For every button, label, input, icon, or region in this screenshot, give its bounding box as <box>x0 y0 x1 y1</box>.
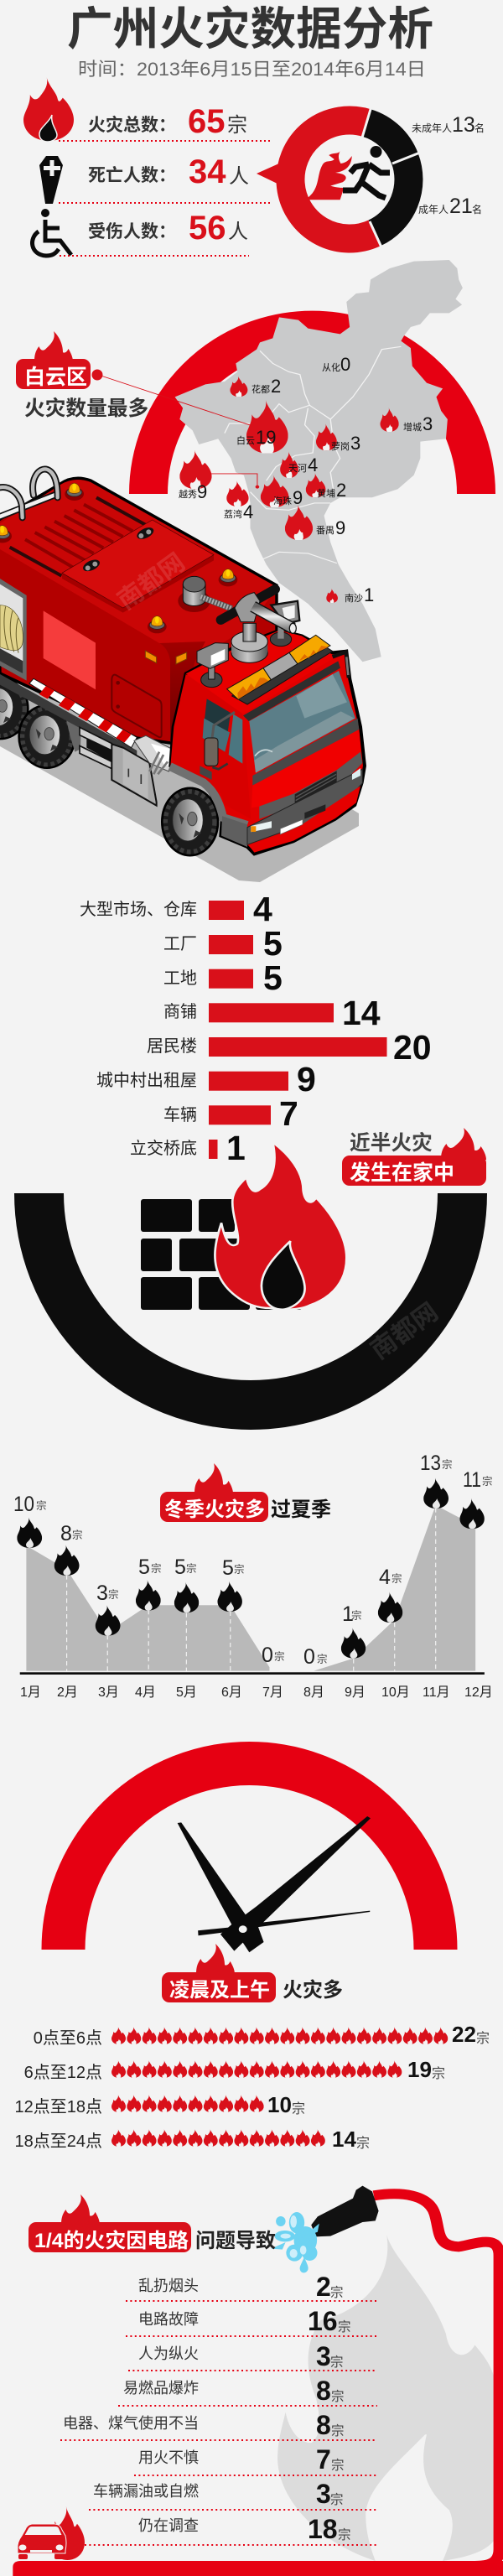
panel: monthly fires: 宗 <box>482 1475 493 1488</box>
date range subtitle: 时间：2013年6月15日至2014年6月14日 <box>78 59 426 80</box>
donut label: minors: 名 <box>474 122 485 134</box>
heading: winter: 过夏季 <box>271 1498 331 1521</box>
panel: monthly fires: 宗 <box>234 1563 245 1576</box>
value labels: 8 <box>60 1522 72 1545</box>
value labels: 0 <box>262 1644 273 1667</box>
panel: monthly fires <box>13 1452 493 1700</box>
district labels: 9 <box>293 487 303 508</box>
value labels: 13 <box>420 1452 441 1475</box>
bar labels: 工地 <box>163 969 197 988</box>
bumper <box>247 769 362 844</box>
fuel tank <box>111 744 157 806</box>
donut chart: casualties <box>257 106 424 249</box>
bar values: 5 <box>263 958 283 997</box>
district labels: 4 <box>308 454 318 475</box>
cause counts: 7 <box>316 2444 331 2475</box>
icon: burning car <box>18 2506 85 2560</box>
total fires row: 宗 <box>227 114 247 137</box>
illustration: fire truck <box>0 469 365 882</box>
deaths row: 人 <box>229 165 249 188</box>
district labels: 19 <box>256 427 276 448</box>
panel: causes: 宗 <box>330 2492 344 2507</box>
panel: causes: 宗 <box>330 2285 344 2300</box>
bar labels: 商铺 <box>163 1002 197 1021</box>
district flames <box>179 376 399 603</box>
bar values <box>226 890 432 1167</box>
cause counts: 8 <box>316 2410 331 2440</box>
rails <box>0 469 58 517</box>
area chart <box>17 1478 485 1675</box>
cause counts: 18 <box>308 2514 338 2544</box>
nozzle <box>311 2186 379 2236</box>
district labels: 荔湾 <box>224 508 242 520</box>
side windows <box>203 699 231 752</box>
panel: bar chart by location <box>80 890 432 1167</box>
beacons <box>65 483 84 501</box>
month axis labels: 8月 <box>303 1685 324 1700</box>
water splash <box>271 2212 319 2272</box>
bar values: 20 <box>393 1028 432 1067</box>
heading: electrical: 问题导致 <box>195 2230 276 2252</box>
panel: home fire illustration <box>39 1142 463 1405</box>
roof panel <box>62 520 214 613</box>
donut label: adults: 成年人 <box>418 204 449 216</box>
cause labels: 易燃品爆炸 <box>123 2380 199 2397</box>
bar labels <box>80 900 197 1158</box>
title: 广州火灾数据分析 <box>67 4 433 55</box>
value labels <box>13 1452 481 1669</box>
heading: electrical <box>29 2194 276 2252</box>
value labels: 4 <box>379 1566 391 1589</box>
panel: fires by time of day: 宗 <box>356 2136 370 2151</box>
icon: big flame <box>215 1142 346 1310</box>
cab side <box>170 674 251 819</box>
district labels <box>179 354 433 605</box>
panel: clock <box>64 1763 436 2002</box>
time labels: 6点至12点 <box>24 2063 102 2082</box>
cause labels: 车辆漏油或自燃 <box>93 2483 199 2500</box>
injuries row: 人 <box>228 221 248 243</box>
district labels: 0 <box>340 354 350 375</box>
month axis labels: 1月 <box>20 1685 41 1700</box>
callout: Baiyun district: 白云区 <box>24 366 87 389</box>
district labels: 海珠 <box>273 495 292 506</box>
counts <box>267 2022 476 2152</box>
panel: monthly fires: 宗 <box>442 1458 453 1471</box>
panel: monthly fires: 宗 <box>151 1562 162 1575</box>
district labels: 3 <box>350 433 360 454</box>
value labels: 5 <box>174 1555 186 1579</box>
front wheel <box>162 788 218 855</box>
ground shadow <box>0 671 359 882</box>
flame row 18-24 <box>111 2129 325 2147</box>
panel: causes: 宗 <box>338 2527 351 2542</box>
time labels: 0点至6点 <box>34 2028 102 2048</box>
donut label: minors: 13 <box>452 113 475 137</box>
map of Guangzhou <box>97 260 463 662</box>
time labels <box>15 2028 102 2151</box>
total fires row <box>88 103 247 140</box>
cause labels: 用火不慎 <box>138 2449 199 2466</box>
roof vents <box>25 505 132 569</box>
value labels: 5 <box>222 1556 234 1580</box>
panel: monthly fires: 宗 <box>274 1650 285 1663</box>
district labels: 2 <box>336 480 346 501</box>
cause labels: 电路故障 <box>138 2311 199 2328</box>
value labels: 10 <box>13 1493 34 1516</box>
donut label: adults: 21 <box>449 195 473 218</box>
district labels: 番禺 <box>316 525 334 536</box>
big grey flame and hose <box>13 2186 503 2576</box>
district labels: 9 <box>335 517 345 538</box>
mirror <box>212 712 235 740</box>
district labels: 2 <box>271 376 281 397</box>
bar values: 14 <box>342 994 381 1032</box>
month axis labels: 5月 <box>176 1685 197 1700</box>
district labels: 南沙 <box>345 593 363 604</box>
bar values: 4 <box>253 890 272 928</box>
side marker lights <box>145 651 157 663</box>
bar values: 9 <box>297 1060 316 1098</box>
flame row 0-6 <box>111 2027 448 2044</box>
panel: totals <box>23 77 249 256</box>
front face <box>252 719 359 786</box>
panel: monthly fires: 宗 <box>351 1609 362 1622</box>
bar labels: 车辆 <box>163 1105 197 1124</box>
callout: nearly half at home: 发生在家中 <box>350 1161 454 1185</box>
box body <box>0 478 277 743</box>
clock hands <box>178 1816 371 1952</box>
callout: Baiyun district <box>16 331 148 420</box>
donut label: adults: 名 <box>472 203 482 216</box>
district labels: 4 <box>243 501 253 522</box>
callout: nearly half at home <box>342 1128 486 1186</box>
panel: monthly fires: 宗 <box>72 1529 83 1541</box>
counts: 10 <box>267 2092 292 2117</box>
cause counts <box>308 2272 338 2544</box>
deaths row: 34 <box>189 153 226 190</box>
month axis labels: 11月 <box>423 1685 450 1700</box>
panel: fires by time of day: 宗 <box>292 2101 305 2116</box>
icon: running person and flame <box>305 146 390 200</box>
month axis labels: 2月 <box>57 1685 78 1700</box>
time labels: 12点至18点 <box>15 2097 102 2116</box>
connector lines <box>97 375 257 486</box>
panel: monthly fires: 宗 <box>36 1499 47 1512</box>
bar values: 5 <box>263 924 283 963</box>
bar labels: 立交桥底 <box>130 1139 197 1158</box>
value labels: 0 <box>303 1645 315 1669</box>
small cylinder and spring <box>178 589 210 612</box>
cause dividers <box>60 2301 377 2545</box>
deaths row <box>88 153 249 190</box>
district labels: 花都 <box>252 384 270 395</box>
panel: causes: 宗 <box>331 2389 345 2404</box>
cause labels <box>63 2277 199 2534</box>
black ring <box>39 1193 463 1405</box>
month axis labels: 10月 <box>381 1685 410 1700</box>
cause counts: 2 <box>316 2272 331 2302</box>
total fires row: 火灾总数： <box>88 115 176 135</box>
panel: causes: 宗 <box>330 2355 344 2370</box>
month axis labels: 6月 <box>221 1685 242 1700</box>
district labels: 黄埔 <box>317 487 335 499</box>
heading: early morning: 火灾多 <box>283 1979 343 2002</box>
callout: nearly half at home: 近半火灾 <box>350 1131 433 1155</box>
callout: Baiyun district: 火灾数量最多 <box>24 397 148 420</box>
deaths row: 死亡人数： <box>88 166 176 185</box>
pointer <box>257 163 281 185</box>
month axis labels: 7月 <box>262 1685 283 1700</box>
district labels: 增城 <box>403 421 422 433</box>
flame row 6-12 <box>111 2060 402 2078</box>
bar labels: 工厂 <box>163 935 197 953</box>
red arc <box>64 1763 436 1950</box>
injuries row <box>88 210 248 247</box>
icon: flame <box>23 77 74 142</box>
cause labels: 乱扔烟头 <box>138 2277 199 2294</box>
counts: 22 <box>452 2022 476 2047</box>
month axis labels <box>20 1685 493 1700</box>
value labels: 1 <box>342 1602 354 1626</box>
panel: causes: 宗 <box>338 2319 351 2334</box>
injuries row: 受伤人数： <box>88 222 176 242</box>
panel: district map <box>16 260 476 662</box>
panel: fires by time of day: 宗 <box>432 2066 445 2081</box>
counts: 14 <box>332 2127 356 2152</box>
heading: early morning: 凌晨及上午 <box>169 1979 270 2002</box>
panel: monthly fires: 宗 <box>317 1653 328 1665</box>
cause labels: 人为纵火 <box>138 2345 199 2362</box>
panel: monthly fires: 宗 <box>186 1562 197 1575</box>
district labels: 越秀 <box>179 488 197 500</box>
cause counts: 3 <box>316 2479 331 2509</box>
cause labels: 仍在调查 <box>138 2517 199 2534</box>
donut label: adults <box>418 195 482 218</box>
donut label: minors: 未成年人 <box>412 122 452 134</box>
chassis <box>0 674 137 759</box>
icon: coffin <box>39 156 63 204</box>
panel: monthly fires: 宗 <box>108 1588 119 1601</box>
hose <box>374 2194 499 2566</box>
turret <box>220 589 296 662</box>
bar values: 1 <box>226 1129 246 1167</box>
cab roof <box>186 631 335 714</box>
value labels: 3 <box>96 1581 108 1605</box>
month axis labels: 3月 <box>98 1685 119 1700</box>
rear wheels <box>0 678 81 768</box>
striped bumper band <box>29 678 137 748</box>
cause counts: 16 <box>308 2306 338 2336</box>
district labels: 白云 <box>236 434 255 446</box>
post <box>333 652 349 678</box>
bar labels: 居民楼 <box>147 1036 197 1056</box>
injuries row: 56 <box>189 210 226 247</box>
bar values: 7 <box>279 1094 298 1133</box>
cause labels: 电器、煤气使用不当 <box>63 2415 199 2432</box>
district labels: 1 <box>364 584 374 605</box>
panel: causes: 宗 <box>331 2423 345 2438</box>
cause counts: 3 <box>316 2341 331 2371</box>
icon: brick wall <box>141 1199 302 1310</box>
watermark: 南都网 <box>113 548 190 615</box>
icon: wheelchair <box>33 209 71 256</box>
panel: fires by time of day: 宗 <box>476 2031 490 2046</box>
panel: monthly fires: 宗 <box>392 1572 402 1585</box>
value labels: 11 <box>463 1468 481 1492</box>
donut label: minors <box>412 113 485 137</box>
door panel <box>111 675 162 737</box>
counts: 19 <box>407 2057 432 2082</box>
cab <box>170 589 365 854</box>
district labels: 9 <box>197 481 207 502</box>
roof <box>0 480 277 654</box>
storage bay with hose <box>0 579 27 681</box>
heading: early morning <box>162 1944 343 2002</box>
time labels: 18点至24点 <box>15 2132 102 2151</box>
spot lamp left <box>201 673 222 688</box>
panel: causes <box>13 2186 503 2576</box>
bar labels: 大型市场、仓库 <box>80 900 197 919</box>
month axis labels: 4月 <box>135 1685 156 1700</box>
total fires row: 65 <box>188 103 225 140</box>
heading: winter: 冬季火灾多 <box>164 1498 265 1521</box>
district labels: 3 <box>423 413 433 434</box>
watermark right: 南都网 <box>366 1298 443 1365</box>
bars <box>209 901 387 1159</box>
windshield <box>243 661 340 721</box>
spot lamp right <box>270 632 292 647</box>
panel: fires by time of day <box>15 2022 490 2152</box>
bar labels: 城中村出租屋 <box>96 1071 197 1090</box>
district labels: 从化 <box>322 361 340 373</box>
district labels: 萝岗 <box>331 441 350 452</box>
heading: winter <box>160 1463 331 1522</box>
panel: causes: 宗 <box>331 2458 345 2473</box>
month flames <box>17 1478 485 1659</box>
light bar <box>227 635 333 704</box>
flame row 12-18 <box>111 2095 264 2112</box>
fender <box>170 766 247 825</box>
month axis labels: 9月 <box>345 1685 366 1700</box>
light red panel <box>44 610 96 689</box>
month axis labels: 12月 <box>464 1685 493 1700</box>
heading: electrical: 1/4的火灾因电路 <box>34 2230 189 2252</box>
cause counts: 8 <box>316 2376 331 2406</box>
red arc behind map <box>148 330 476 494</box>
value labels: 5 <box>138 1555 150 1579</box>
front of box <box>159 641 205 742</box>
district labels: 天河 <box>288 463 307 474</box>
